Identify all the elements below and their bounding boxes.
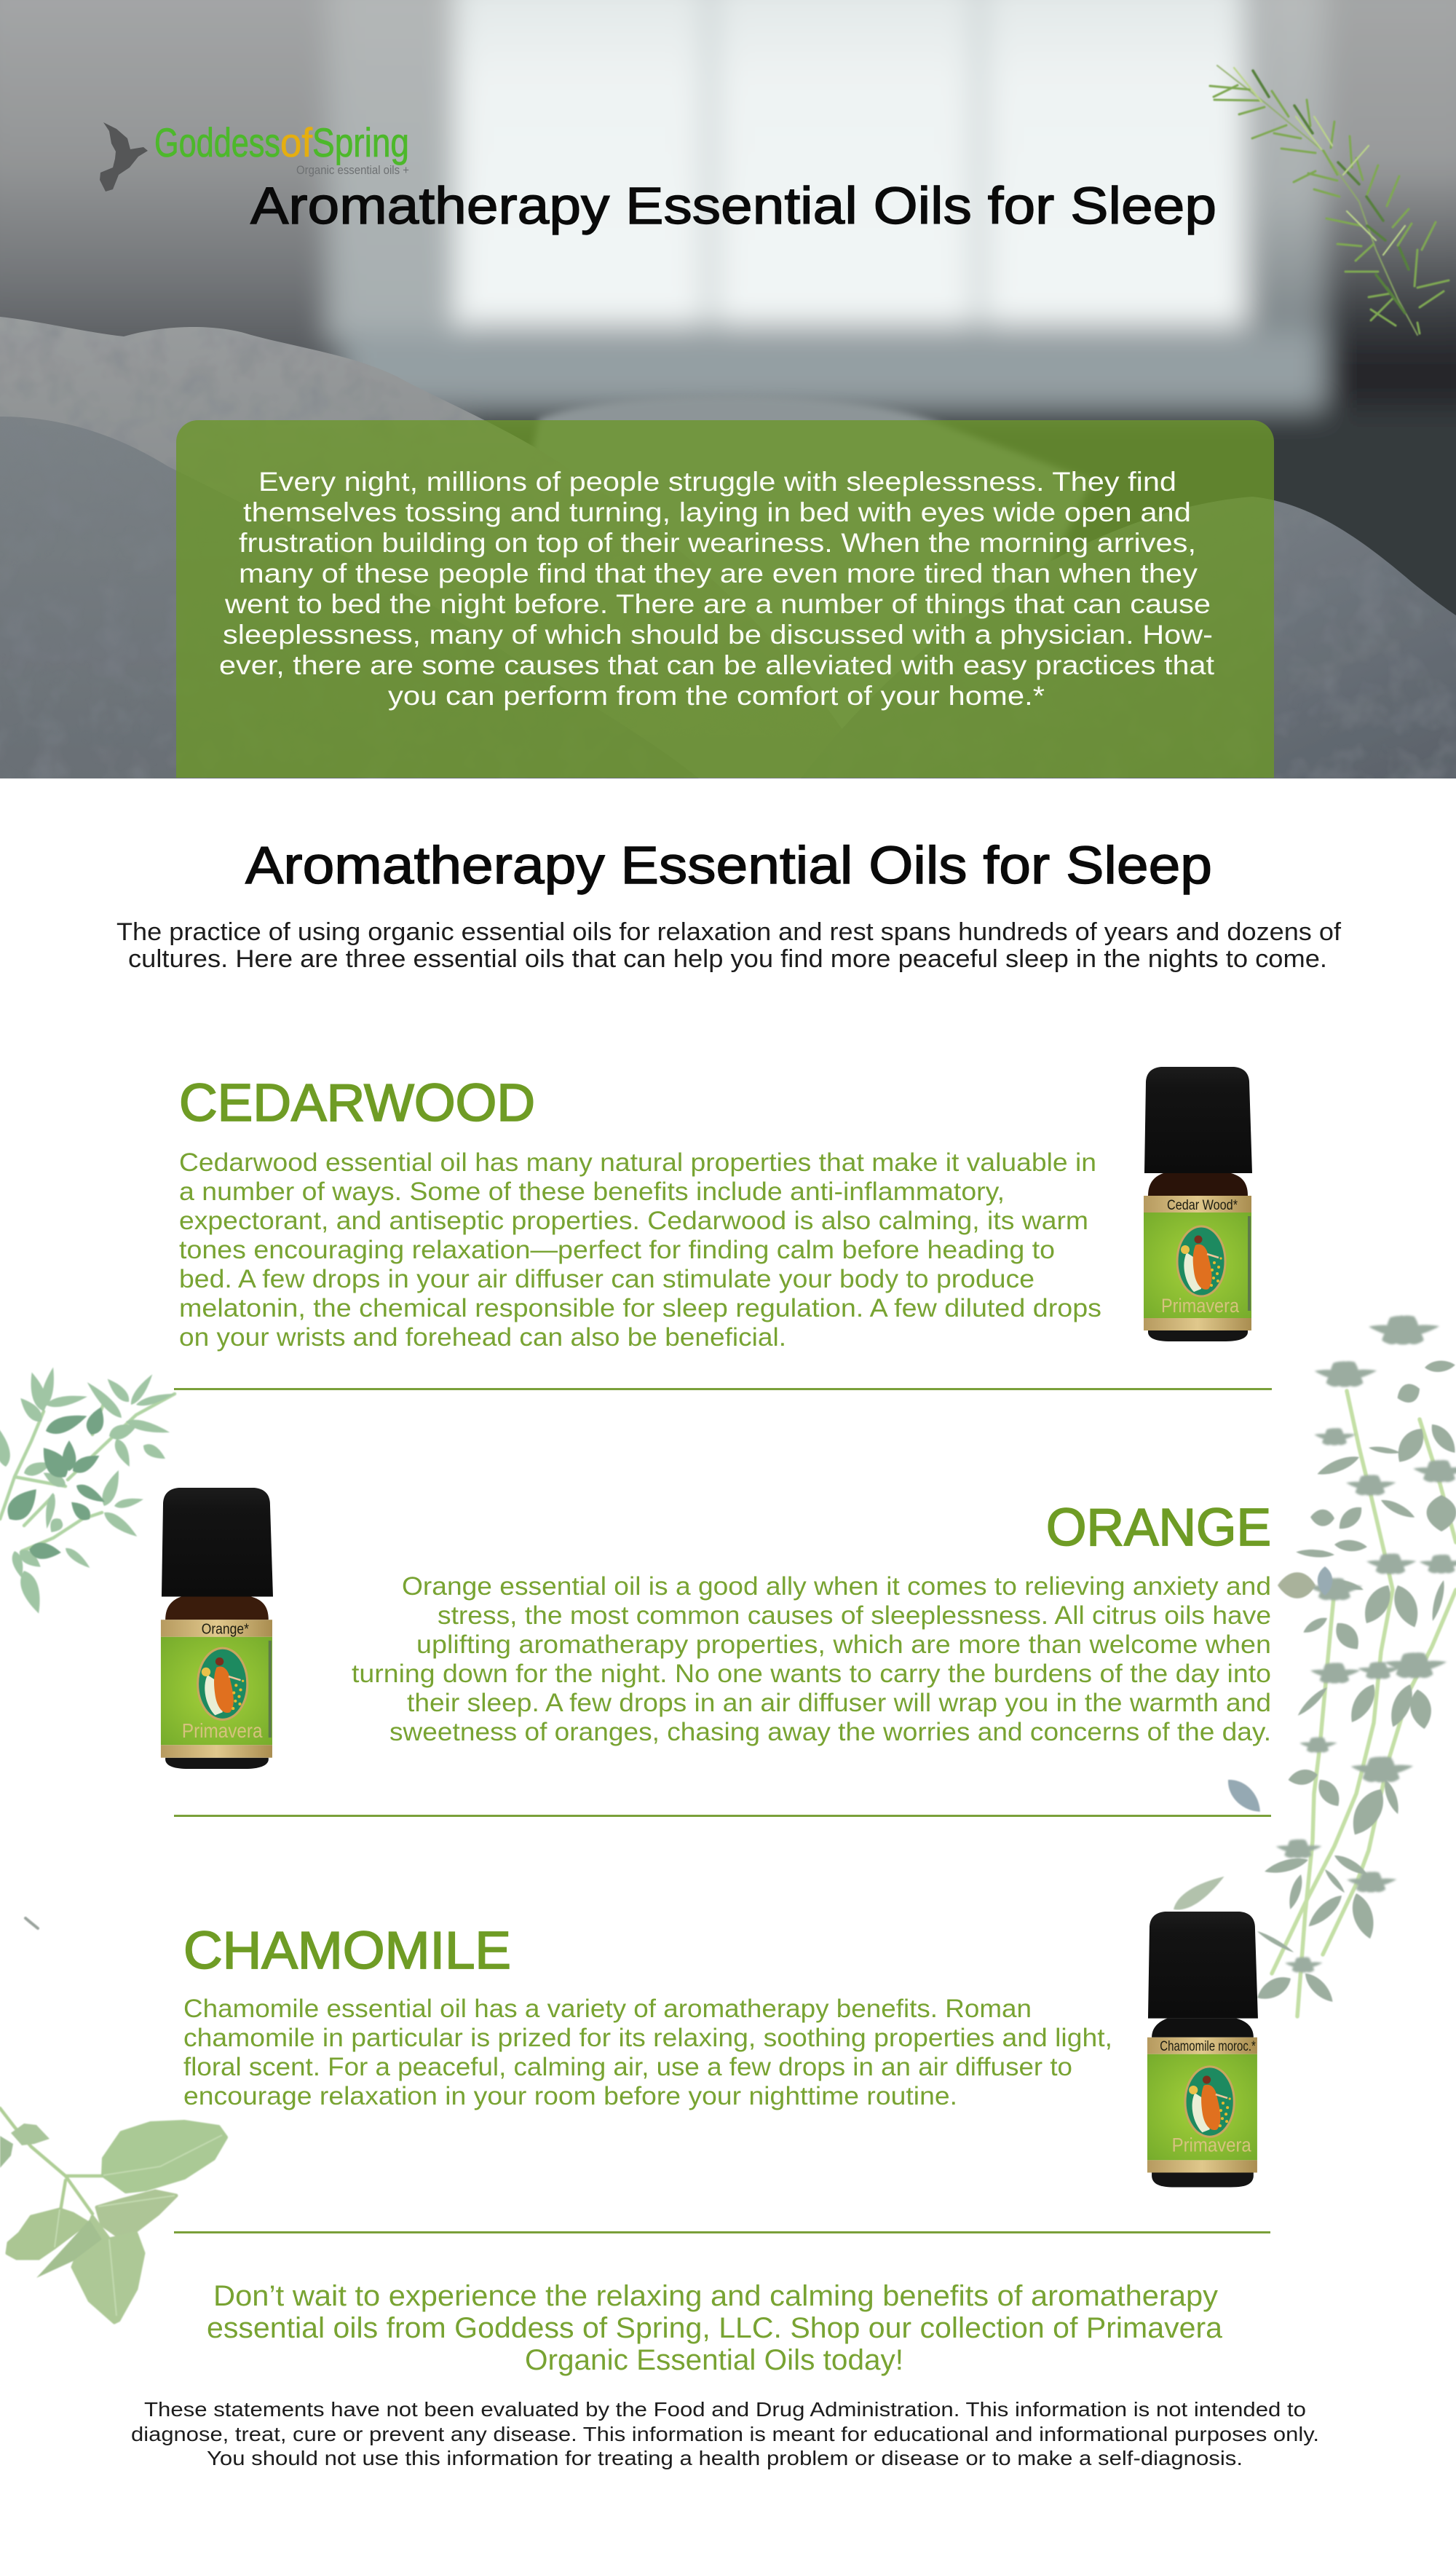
icon: chamomile bottle [1147, 1912, 1258, 2188]
intro paragraph: Every night, millions of people struggle with sleeplessness. They find [258, 467, 1176, 497]
hero photo background: bedroom window and blanket [0, 0, 1456, 786]
icon: cedar wood bottle: Primavera [1161, 1295, 1240, 1317]
orange body text [352, 1572, 1271, 1746]
blanket: right fold [801, 497, 1456, 778]
cedarwood body text: a number of ways. Some of these benefits include anti-inflammatory, [179, 1178, 1005, 1206]
disclaimer text: You should not use this information for treating a health problem or disease or to make a self-diagnosis. [207, 2447, 1243, 2469]
panel background [176, 420, 1274, 778]
cedarwood body text: expectorant, and antiseptic properties. Cedarwood is also calming, its warm [179, 1207, 1088, 1235]
icon: oregano sprig left [0, 1366, 175, 1616]
callout: shop call to action [207, 2280, 1223, 2376]
logo wordmark: Spring [312, 119, 409, 165]
icon: basil sprig bottom left [0, 1918, 226, 2322]
icon: chamomile bottle: Primavera [1172, 2134, 1251, 2156]
chamomile body text: floral scent. For a peaceful, calming air, use a few drops in an air diffuser to [183, 2053, 1072, 2081]
section intro text: The practice of using organic essential oils for relaxation and rest spans hundreds of years and dozens of [116, 918, 1342, 946]
callout: shop call to action: Organic Essential Oils today! [525, 2344, 903, 2376]
intro paragraph: ever, there are some causes that can be alleviated with easy practices that [219, 650, 1215, 680]
icon: chamomile bottle: Chamomile moroc.* [1160, 2039, 1256, 2054]
orange body text: stress, the most common causes of sleeplessness. All citrus oils have [438, 1601, 1271, 1630]
heading: cedarwood: CEDARWOOD [179, 1074, 535, 1132]
section heading: Aromatherapy Essential Oils for Sleep [245, 837, 1212, 895]
heading: orange: ORANGE [1046, 1499, 1271, 1557]
orange body text: turning down for the night. No one wants to carry the burdens of the day into [352, 1660, 1271, 1688]
orange body text: uplifting aromatherapy properties, which are more than welcome when [416, 1630, 1271, 1659]
icon: dove silhouette [100, 122, 148, 192]
cedarwood body text: tones encouraging relaxation—perfect for finding calm before heading to [179, 1236, 1055, 1264]
intro paragraph: you can perform from the comfort of your home.* [388, 681, 1045, 711]
orange body text: Orange essential oil is a good ally when it comes to relieving anxiety and [402, 1572, 1271, 1601]
panel: cedarwood [179, 1067, 1252, 1352]
chamomile body text: encourage relaxation in your room before your nighttime routine. [183, 2082, 957, 2110]
blanket: back left fold [0, 317, 874, 778]
intro paragraph: frustration building on top of their weariness. When the morning arrives, [239, 528, 1196, 558]
callout: shop call to action: essential oils from Goddess of Spring, LLC. Shop our collection of Primavera [207, 2312, 1223, 2344]
intro paragraph: many of these people find that they are even more tired than when they [239, 559, 1198, 588]
disclaimer text [131, 2398, 1319, 2469]
icon: thyme stems right [1169, 1310, 1456, 2016]
heading: chamomile: CHAMOMILE [183, 1922, 511, 1980]
icon: orange bottle: Orange* [202, 1621, 249, 1638]
logo wordmark [154, 119, 409, 177]
chamomile body text [183, 1995, 1112, 2110]
section intro text: cultures. Here are three essential oils that can help you find more peaceful sleep in the nights to come. [128, 945, 1327, 973]
icon: rosemary sprig [1210, 66, 1449, 335]
logo wordmark: Goddess [154, 119, 280, 165]
panel: orange [161, 1488, 1271, 1769]
icon: orange bottle [161, 1488, 273, 1769]
orange body text: their sleep. A few drops in an air diffuser will wrap you in the warmth and [407, 1689, 1271, 1717]
cedarwood body text: melatonin, the chemical responsible for sleep regulation. A few diluted drops [179, 1294, 1101, 1322]
blanket hump behind the panel [533, 399, 1089, 728]
logo wordmark: Organic essential oils + [296, 163, 409, 177]
icon: cedar wood bottle: Cedar Wood* [1167, 1198, 1238, 1213]
cedarwood body text: on your wrists and forehead can also be beneficial. [179, 1323, 786, 1352]
section intro text [116, 918, 1342, 973]
cedarwood body text: bed. A few drops in your air diffuser can stimulate your body to produce [179, 1265, 1034, 1293]
disclaimer text: diagnose, treat, cure or prevent any disease. This information is meant for educational and informational purposes only. [131, 2423, 1319, 2445]
title: hero heading: Aromatherapy Essential Oils for Sleep [250, 178, 1216, 235]
callout: shop call to action: Don’t wait to experience the relaxing and calming benefits of aromatherapy [213, 2280, 1218, 2312]
logo: Goddess of Spring [100, 119, 409, 192]
intro paragraph: themselves tossing and turning, laying in bed with eyes wide open and [243, 497, 1191, 527]
disclaimer text: These statements have not been evaluated by the Food and Drug Administration. This information is not intended to [144, 2398, 1306, 2421]
cedarwood body text: Cedarwood essential oil has many natural properties that make it valuable in [179, 1148, 1096, 1177]
intro paragraph: went to bed the night before. There are a number of things that can cause [224, 589, 1211, 619]
chamomile body text: chamomile in particular is prized for its relaxing, soothing properties and light, [183, 2024, 1112, 2052]
orange body text: sweetness of oranges, chasing away the worries and concerns of the day. [389, 1718, 1271, 1746]
cedarwood body text [179, 1148, 1101, 1352]
icon: cedar wood bottle [1144, 1067, 1252, 1341]
blanket: front left fold [0, 417, 699, 778]
intro paragraph: sleeplessness, many of which should be discussed with a physician. How- [223, 620, 1213, 650]
panel: introduction [176, 420, 1274, 778]
chamomile body text: Chamomile essential oil has a variety of aromatherapy benefits. Roman [183, 1995, 1032, 2023]
intro paragraph [219, 467, 1215, 711]
panel: chamomile [183, 1912, 1258, 2188]
logo wordmark: of [280, 119, 312, 165]
icon: orange bottle: Primavera [182, 1719, 263, 1742]
